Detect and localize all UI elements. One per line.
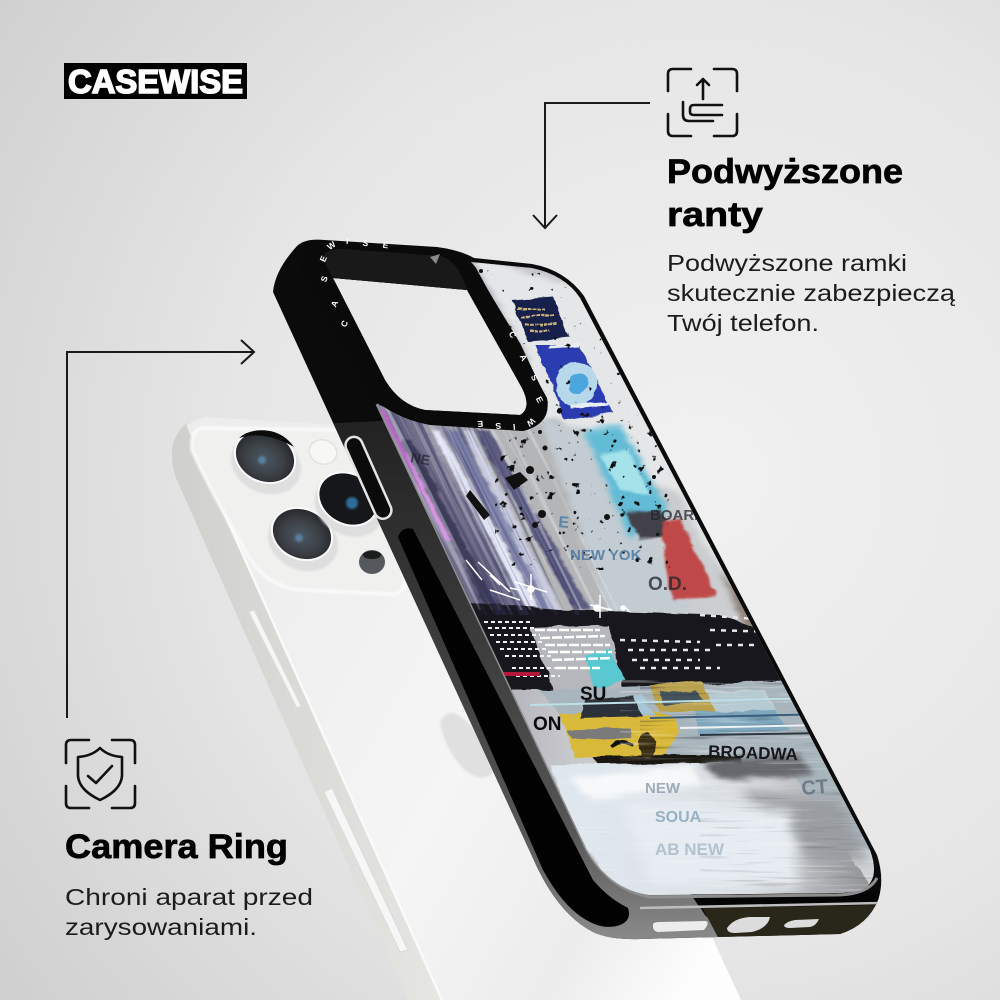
white building xyxy=(530,624,622,690)
arrow: left callout xyxy=(67,340,254,718)
camera ring xyxy=(300,236,548,432)
phone highlight line xyxy=(205,470,442,1000)
building windows left xyxy=(484,622,560,676)
taxi bumper mark xyxy=(610,742,632,746)
brushed lower streaks xyxy=(560,780,880,895)
taxi window glass xyxy=(632,695,655,716)
ring lettering lower: A xyxy=(518,353,530,363)
ring lettering upper: S xyxy=(319,274,330,283)
sign disc core xyxy=(568,374,588,394)
street band xyxy=(540,680,870,850)
text: raised edges description xyxy=(667,250,955,336)
flash xyxy=(306,436,340,468)
horizontal dark streaks xyxy=(640,680,840,760)
taxi body xyxy=(560,706,678,757)
ring frame xyxy=(300,242,548,431)
vertical light streaks xyxy=(366,400,619,610)
sparkles xyxy=(466,560,630,618)
sidewalk grey streak xyxy=(740,790,870,860)
text: camera ring description: Chroni aparat przed xyxy=(65,884,313,910)
brushed lower dark streaks xyxy=(700,790,880,890)
apple logo xyxy=(440,713,494,778)
phone side band xyxy=(172,424,442,1000)
paint splatter dense xyxy=(495,400,670,570)
vertical dark streaks xyxy=(366,400,581,615)
traffic lines xyxy=(530,698,830,735)
white phone xyxy=(172,417,741,1000)
inner wall glint xyxy=(430,254,440,264)
artwork xyxy=(366,255,890,905)
text: camera ring description: zarysowaniami. xyxy=(65,914,257,940)
art lettering: NEW YOK xyxy=(570,547,642,564)
sidewalk dark shadow xyxy=(700,755,815,780)
horizontal light streaks xyxy=(620,680,860,770)
sidewalk pale wash xyxy=(620,800,800,885)
translucent lower body xyxy=(320,420,880,945)
camera plateau xyxy=(192,428,405,594)
faded lettering xyxy=(645,780,725,859)
microphone xyxy=(359,550,385,574)
building windows right xyxy=(620,615,780,668)
ring lettering lower: S xyxy=(495,421,502,431)
blue sign xyxy=(535,345,612,420)
ring lettering lower: I xyxy=(513,422,516,432)
splatter xyxy=(466,269,656,528)
lens upper xyxy=(221,420,311,505)
taxi hood highlight xyxy=(566,728,632,740)
taxi wheel xyxy=(638,732,656,758)
faded lettering: AB NEW xyxy=(655,840,725,859)
blue-grey building xyxy=(540,420,690,615)
ring lettering upper: E xyxy=(382,240,390,251)
sidewalk xyxy=(550,762,880,900)
logo: CASEWISE xyxy=(68,63,243,100)
art lettering: BOARD xyxy=(650,507,705,524)
dark sign right xyxy=(625,510,672,540)
phone case xyxy=(273,236,890,945)
building windows centre xyxy=(535,630,612,668)
sign lines xyxy=(517,309,558,331)
left side slot xyxy=(398,528,629,927)
text: raised edges description: Twój telefon. xyxy=(667,310,819,336)
paint splatter sparse xyxy=(470,265,680,395)
ring lettering lower: S xyxy=(529,373,541,383)
bottom port center xyxy=(727,917,770,933)
art lettering: O.D. xyxy=(648,574,687,595)
case shell xyxy=(273,240,881,939)
ring lettering lower: E xyxy=(534,395,546,405)
art lettering street: BROADWA xyxy=(708,742,798,764)
bottom port left xyxy=(653,921,708,932)
white sign bars xyxy=(549,345,608,407)
top white wall xyxy=(471,262,682,493)
phone back panel xyxy=(172,417,741,1000)
text: camera ring description xyxy=(65,884,313,940)
art lettering xyxy=(409,449,705,595)
faded lettering: SOUA xyxy=(655,809,702,826)
cyan highlight xyxy=(600,450,650,495)
sign disc xyxy=(555,361,597,407)
art lettering street xyxy=(533,684,829,800)
red sign xyxy=(662,518,716,600)
ring lettering upper: E xyxy=(318,254,329,263)
taxi shadow xyxy=(592,754,742,765)
art lettering: NE xyxy=(409,449,431,468)
cyan panel xyxy=(585,425,668,540)
artwork rim xyxy=(377,404,877,897)
art lettering: E xyxy=(558,514,570,532)
artwork base xyxy=(370,255,890,905)
ring lettering upper: W xyxy=(325,239,338,252)
heading: raised edges: Podwyższone xyxy=(667,153,903,191)
second taxi windows xyxy=(660,690,705,705)
art lettering street: SU xyxy=(580,684,606,705)
ring lettering upper: S xyxy=(362,238,370,249)
icon: raised edges xyxy=(668,69,737,136)
art lettering street: CT xyxy=(801,776,829,800)
text: raised edges description: skutecznie zabezpieczą xyxy=(667,280,955,306)
taxi windshield xyxy=(580,696,642,718)
painted layer xyxy=(380,255,880,900)
ring lettering lower: W xyxy=(524,416,537,429)
right light strip xyxy=(680,492,730,582)
blue car xyxy=(690,690,790,735)
icon: shield xyxy=(66,740,135,808)
brown wall xyxy=(718,571,753,627)
purple left stripes xyxy=(380,408,592,610)
ring lettering lower xyxy=(477,330,546,432)
bottom port right xyxy=(784,919,819,928)
volume button xyxy=(343,434,394,521)
heading: camera ring: Camera Ring xyxy=(65,828,288,866)
ring lettering upper: I xyxy=(346,236,349,246)
car roof xyxy=(700,690,775,712)
text: raised edges description: Podwyższone ramki xyxy=(667,250,907,276)
ring lettering upper xyxy=(318,236,390,329)
faded lettering: NEW xyxy=(645,780,681,797)
sidewalk white patch xyxy=(570,765,700,800)
cyan storefront xyxy=(585,650,625,690)
ring lettering upper: C xyxy=(338,319,350,329)
lens lower xyxy=(258,497,348,582)
centre grey wall xyxy=(476,417,608,612)
ring lettering lower: E xyxy=(477,419,484,429)
red band xyxy=(503,672,540,676)
side button upper xyxy=(249,610,301,708)
inner wall xyxy=(322,249,467,290)
lens right xyxy=(303,460,395,549)
heading: raised edges: ranty xyxy=(667,196,763,234)
ring lettering upper: A xyxy=(328,299,340,309)
dark navy sign xyxy=(511,297,569,341)
side button lower xyxy=(324,788,408,952)
second taxi xyxy=(648,680,716,712)
dark city band xyxy=(470,603,810,690)
arrow: top callout xyxy=(533,103,650,228)
heading: raised edges xyxy=(667,153,903,234)
ring lettering lower: C xyxy=(507,330,519,340)
art lettering street: ON xyxy=(533,714,562,735)
